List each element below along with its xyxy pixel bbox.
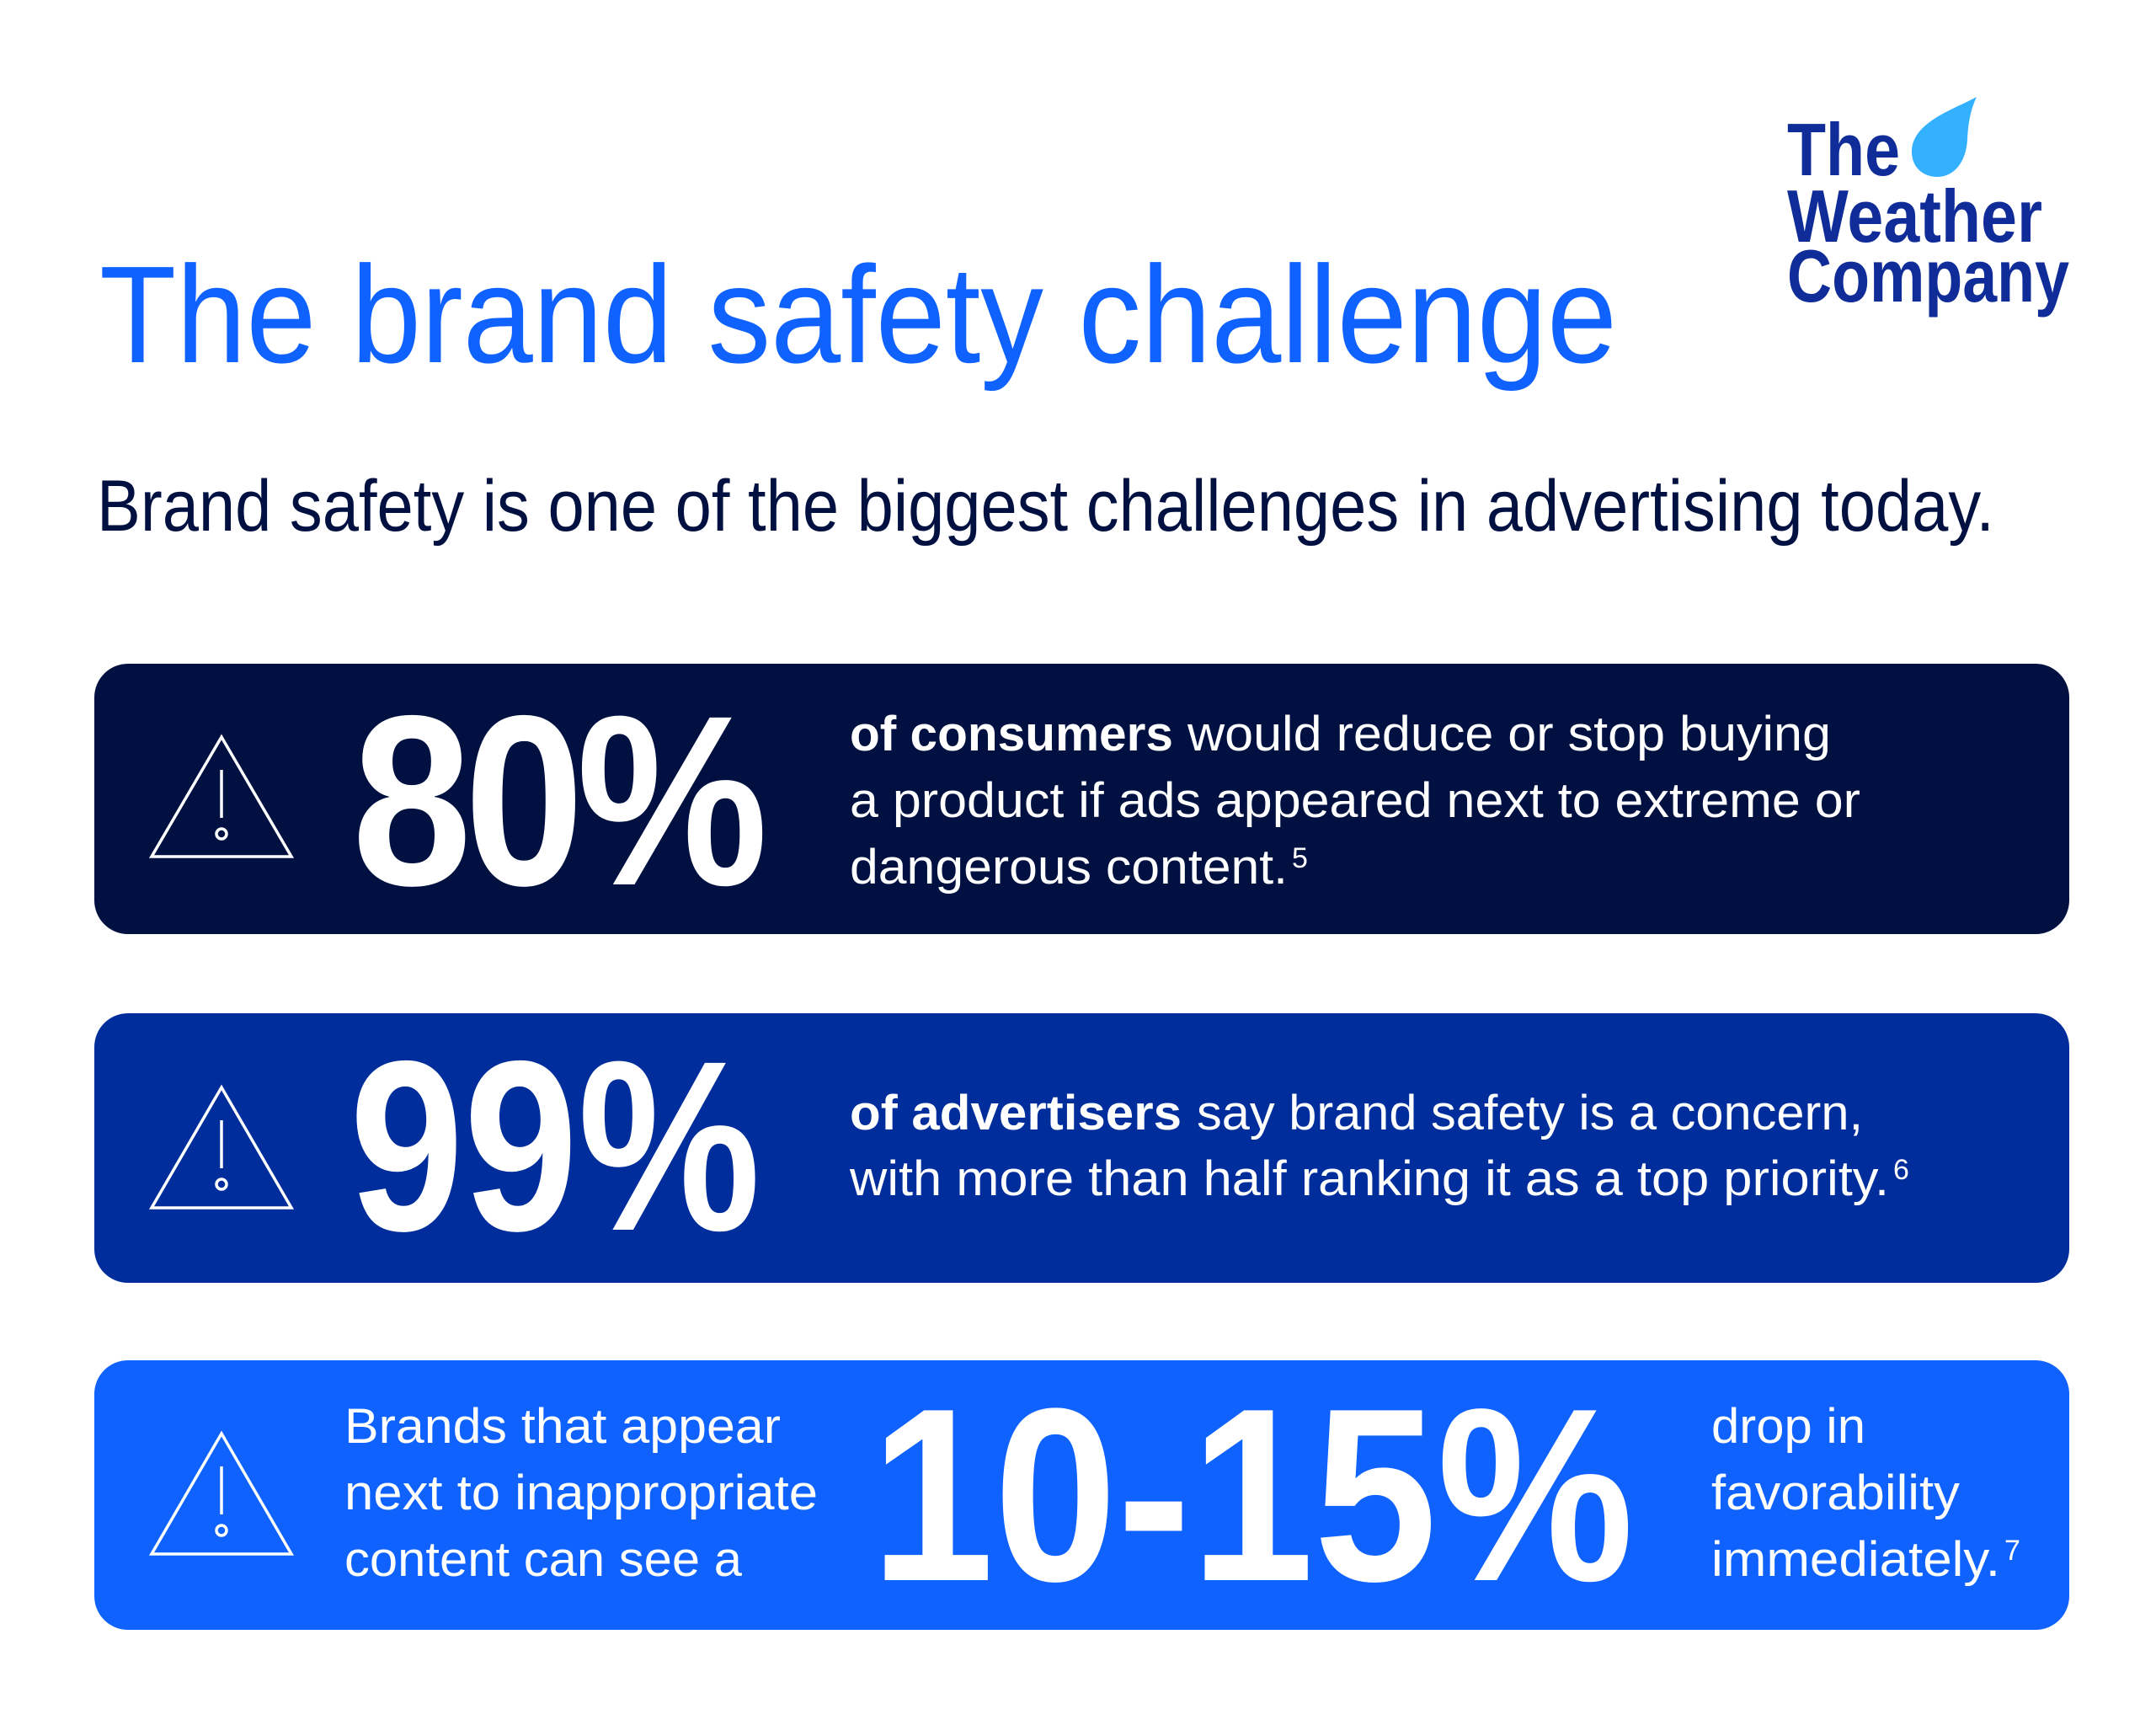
text block left xyxy=(344,1399,818,1587)
text block: a product if ads appeared next to extreme or xyxy=(850,773,1860,828)
subtitle: Brand safety is one of the biggest challenges in advertising today. xyxy=(97,466,1994,547)
panel: 99% advertisers xyxy=(94,1011,2069,1283)
logo drop icon xyxy=(1912,97,1977,177)
text block: with more than half ranking it as a top priority. xyxy=(849,1151,1889,1206)
icon: warning triangle xyxy=(152,1434,291,1554)
text block left: content can see a xyxy=(344,1532,743,1587)
text block right: immediately. xyxy=(1711,1532,2000,1587)
logo: The Weather Company: Weather xyxy=(1787,174,2042,258)
icon: warning triangle xyxy=(152,1087,291,1208)
text block: of advertisers xyxy=(850,1086,1182,1140)
logo: The Weather Company: The xyxy=(1787,108,1900,191)
logo: The Weather Company xyxy=(1787,97,2069,318)
text block left: Brands that appear xyxy=(344,1399,781,1454)
text block: of consumers xyxy=(850,707,1173,761)
title: The brand safety challenge xyxy=(99,238,1617,392)
text block: 6 xyxy=(1893,1154,1909,1186)
text block right: favorability xyxy=(1711,1466,1960,1520)
stat: 10-15%: 10-15% xyxy=(871,1358,1634,1633)
text block right: drop in xyxy=(1711,1399,1865,1454)
text block xyxy=(850,707,1860,895)
stat: 99%: 99% xyxy=(350,1011,760,1282)
panel: 80% consumers xyxy=(94,664,2069,937)
text block right xyxy=(1711,1399,2020,1587)
logo: The Weather Company: Company xyxy=(1787,234,2069,318)
text block: dangerous content. xyxy=(850,840,1288,895)
stat: 80%: 80% xyxy=(352,665,765,937)
text block left: next to inappropriate xyxy=(344,1466,818,1520)
icon: warning triangle xyxy=(152,737,291,857)
text block xyxy=(849,1086,1909,1206)
panel: 10-15% favorability xyxy=(94,1358,2069,1633)
text block right: 7 xyxy=(2004,1535,2020,1567)
text block: say brand safety is a concern, xyxy=(1197,1086,1863,1140)
text block: would reduce or stop buying xyxy=(1187,707,1831,761)
text block: 5 xyxy=(1292,842,1308,874)
